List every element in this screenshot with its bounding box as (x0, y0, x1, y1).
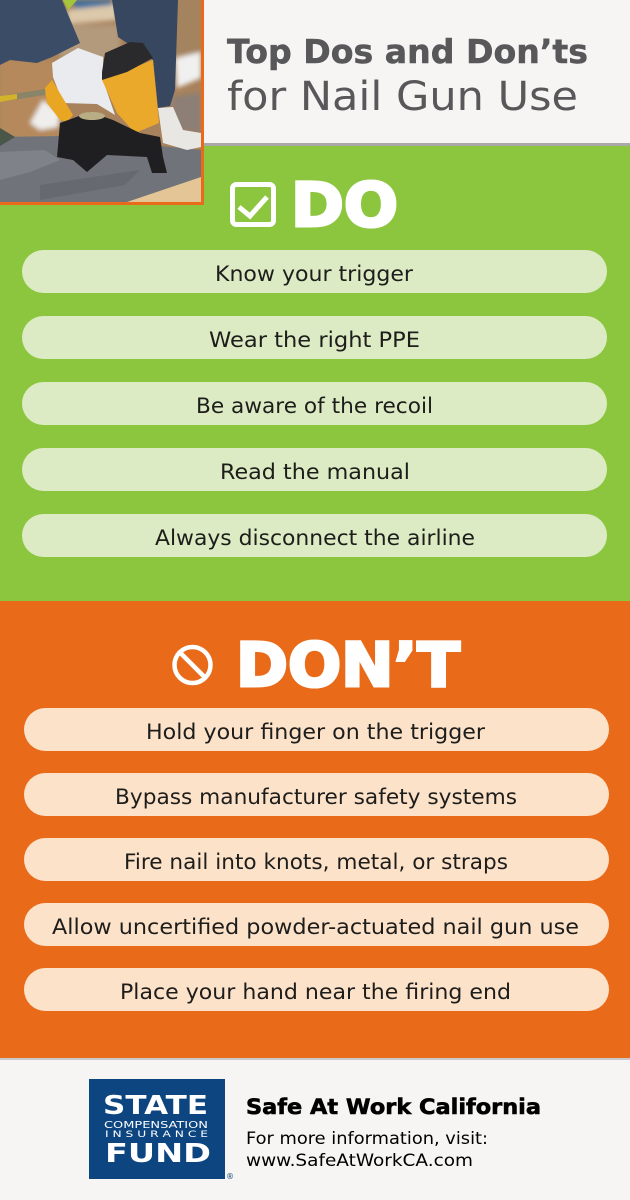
hose (0, 89, 45, 102)
list: do items: Be aware of the recoil (196, 394, 433, 418)
boot (0, 128, 15, 146)
icon: prohibition sign (174, 647, 210, 683)
list: don't items: Hold your finger on the trigger (146, 720, 485, 744)
heading: don't: DON’T (236, 630, 460, 701)
text: footer contact: www.SafeAtWorkCA.com (246, 1151, 473, 1171)
trousers (0, 0, 80, 65)
list: do items (22, 250, 607, 557)
gun (45, 80, 73, 122)
title: Top Dos and Don’ts (227, 32, 588, 71)
logo: State Compensation Insurance Fund: COMPENSATION (104, 1120, 208, 1131)
photo: roofer using nail gun (0, 0, 204, 205)
text: footer contact: Safe At Work California (246, 1095, 541, 1119)
logo: State Compensation Insurance Fund: STATE (103, 1091, 208, 1121)
icon: checkbox (232, 184, 274, 224)
panel: footer (0, 1058, 630, 1200)
logo: State Compensation Insurance Fund (89, 1079, 234, 1181)
list: do items: Know your trigger (215, 262, 413, 286)
panel: don't (0, 601, 630, 1058)
list: do items: Wear the right PPE (209, 328, 420, 352)
list: don't items: Allow uncertified powder-actuated nail gun use (52, 915, 579, 939)
text: footer contact (246, 1095, 541, 1171)
logo: State Compensation Insurance Fund: FUND (105, 1139, 211, 1169)
panel: do (0, 146, 630, 601)
gloves (52, 48, 115, 115)
list: don't items (24, 708, 609, 1011)
list: don't items: Place your hand near the firing end (120, 980, 511, 1004)
list: do items: Always disconnect the airline (155, 526, 475, 550)
logo: State Compensation Insurance Fund: ® (226, 1172, 234, 1181)
list: don't items: Fire nail into knots, metal, or straps (124, 850, 508, 874)
heading: do: DO (291, 170, 398, 241)
title: for Nail Gun Use (227, 74, 578, 120)
text: footer contact: For more information, visit: (246, 1129, 488, 1149)
list: do items: Read the manual (220, 460, 410, 484)
roof shingles (0, 136, 201, 202)
title (227, 32, 588, 120)
panel: header (0, 0, 630, 146)
logo: State Compensation Insurance Fund: I N S U R A N C E (105, 1130, 208, 1140)
list: don't items: Bypass manufacturer safety systems (115, 785, 517, 809)
